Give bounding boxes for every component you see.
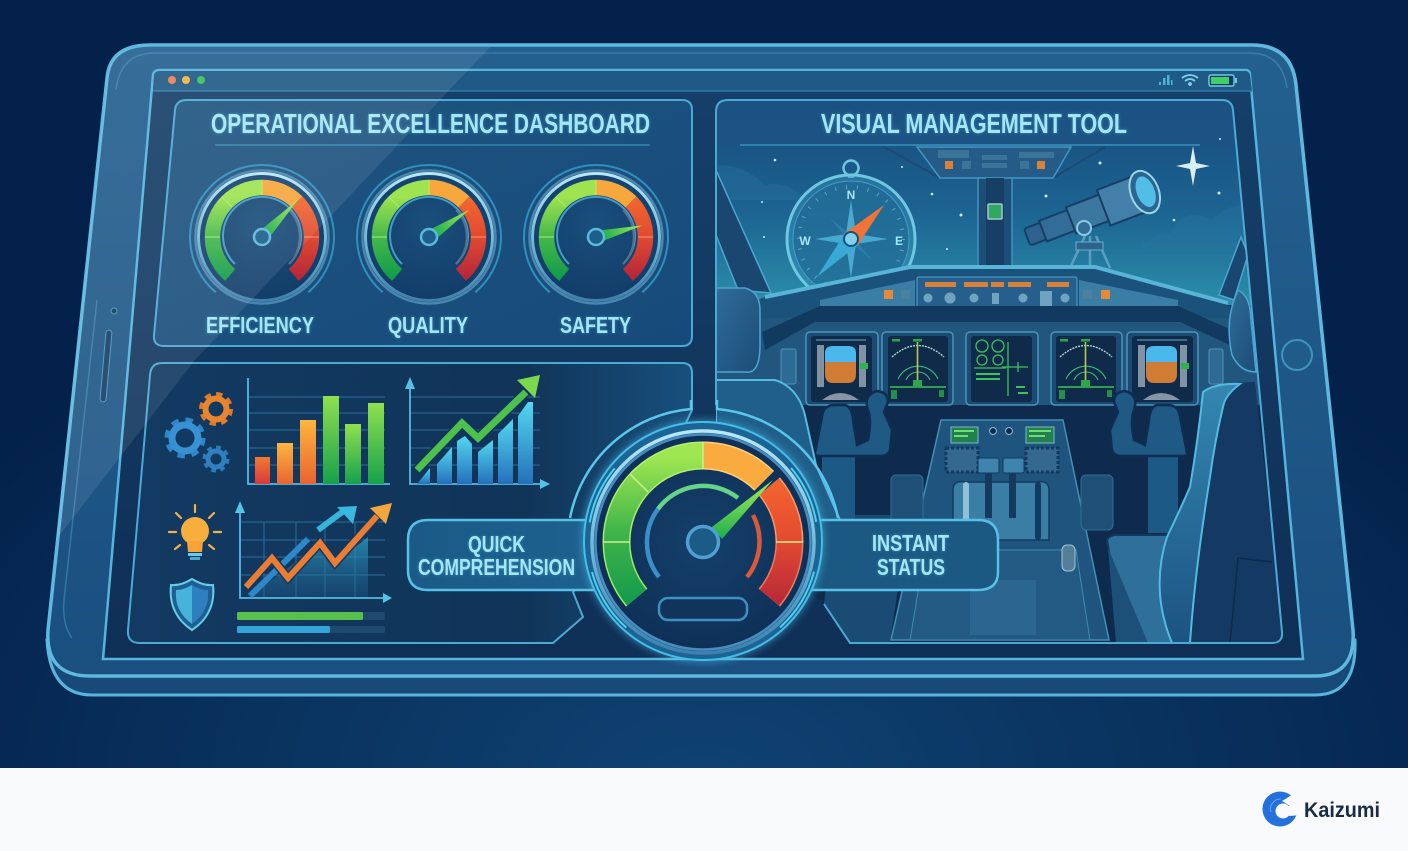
tablet screen: [103, 70, 1303, 659]
connector arc: [570, 400, 838, 518]
needle: [262, 196, 302, 237]
icon: shield: [171, 579, 213, 630]
gauge: efficiency: [190, 165, 334, 304]
speaker slot: [100, 308, 117, 402]
title: OPERATIONAL EXCELLENCE DASHBOARD: [211, 108, 650, 139]
progress bar: blue: [237, 626, 385, 633]
side controls: [781, 349, 1223, 384]
right pilot seat: [1107, 382, 1284, 643]
sky through windshield: [717, 145, 1250, 305]
side seat blocks: [891, 475, 1113, 530]
icon: compass: N: [847, 188, 855, 202]
callout: instant status: INSTANT: [872, 530, 949, 556]
bar chart: performance: [248, 378, 390, 484]
title band: [716, 100, 1236, 145]
icon: light bulb: [169, 505, 221, 560]
yoke columns: [822, 455, 1178, 533]
lower side panel left: [824, 515, 905, 643]
icon: gears: [168, 395, 230, 470]
glass glare: [56, 47, 490, 540]
window controls: [168, 76, 205, 84]
footer band: [0, 768, 1408, 851]
nav display left: [888, 336, 948, 402]
icon: compass: [787, 160, 915, 303]
seat back front band: [1160, 384, 1240, 643]
indicator: green light: [988, 204, 1002, 219]
nav display right: [1056, 336, 1116, 402]
tablet device: [47, 45, 1355, 695]
needle: [712, 480, 773, 539]
status arcs: [616, 455, 790, 598]
callout: quick comprehension: COMPREHENSION: [418, 554, 575, 580]
overhead panel: [917, 147, 1071, 178]
gauge: safety: [524, 165, 668, 304]
seat back rear: [1191, 382, 1281, 642]
tablet lower bezel: [47, 640, 1355, 695]
display units: [781, 332, 1223, 405]
dark footwell: [802, 405, 1271, 642]
label: efficiency: EFFICIENCY: [206, 312, 314, 338]
gauge: quality: [357, 165, 501, 304]
icon: compass: E: [895, 234, 903, 248]
icon: compass: W: [799, 234, 811, 248]
top status bar: [153, 71, 1252, 91]
side highlight arcs: [588, 427, 818, 657]
engine display center: [971, 336, 1032, 402]
label: safety: SAFETY: [560, 312, 631, 338]
dashboard glareshield: [759, 265, 1231, 318]
chart: rising blue bars with green trend arrow: [405, 375, 550, 489]
callout: instant status: STATUS: [877, 554, 945, 580]
logo: Kaizumi: Kaizumi: [1304, 799, 1380, 822]
inner arcs: [647, 486, 759, 577]
icon: battery: [1209, 75, 1237, 86]
title: VISUAL MANAGEMENT TOOL: [821, 108, 1127, 139]
seat cushion: [1107, 535, 1172, 643]
left pilot seat and armrest: [716, 380, 840, 520]
headrests: [716, 288, 1256, 372]
chart: blue and orange trend arrows: [235, 501, 392, 603]
PFD left: [811, 336, 872, 402]
panel: charts and icons: [128, 363, 692, 643]
callout: instant status: [800, 520, 998, 590]
needle: [431, 205, 473, 238]
glareshield shadow band: [762, 306, 1236, 350]
stars: [761, 138, 1221, 250]
panel: cockpit visual management tool: [716, 100, 1284, 645]
icon: wifi: [1182, 75, 1198, 85]
yokes: [815, 391, 1187, 456]
tablet frame: [48, 45, 1353, 676]
hub: [688, 526, 718, 558]
panel: operational excellence dashboard: [154, 100, 692, 346]
home button: [1282, 340, 1312, 370]
callout: quick comprehension: [408, 520, 600, 590]
label: quality: QUALITY: [388, 312, 468, 338]
icon: signal: [1159, 75, 1172, 85]
icon: star: [1176, 146, 1210, 186]
windshield pillars: [716, 147, 1248, 300]
needle: [600, 220, 644, 241]
instrument panel body: [717, 330, 1260, 405]
readout: [659, 598, 747, 620]
icon: wave C: [1262, 792, 1302, 826]
icon: telescope: [1019, 167, 1166, 268]
PFD right: [1132, 336, 1193, 402]
pedestal: [891, 420, 1109, 640]
cockpit scene: [716, 100, 1284, 645]
callout: quick comprehension: QUICK: [468, 531, 525, 557]
right panel outline: [716, 100, 1282, 643]
clouds: [718, 165, 760, 182]
progress bar: green: [237, 612, 385, 620]
main gauge: [570, 400, 838, 662]
frame highlight: [64, 53, 1287, 638]
logo: Kaizumi: [1262, 792, 1380, 826]
center windshield post: [978, 178, 1012, 270]
central annunciator panel: [917, 277, 1077, 308]
